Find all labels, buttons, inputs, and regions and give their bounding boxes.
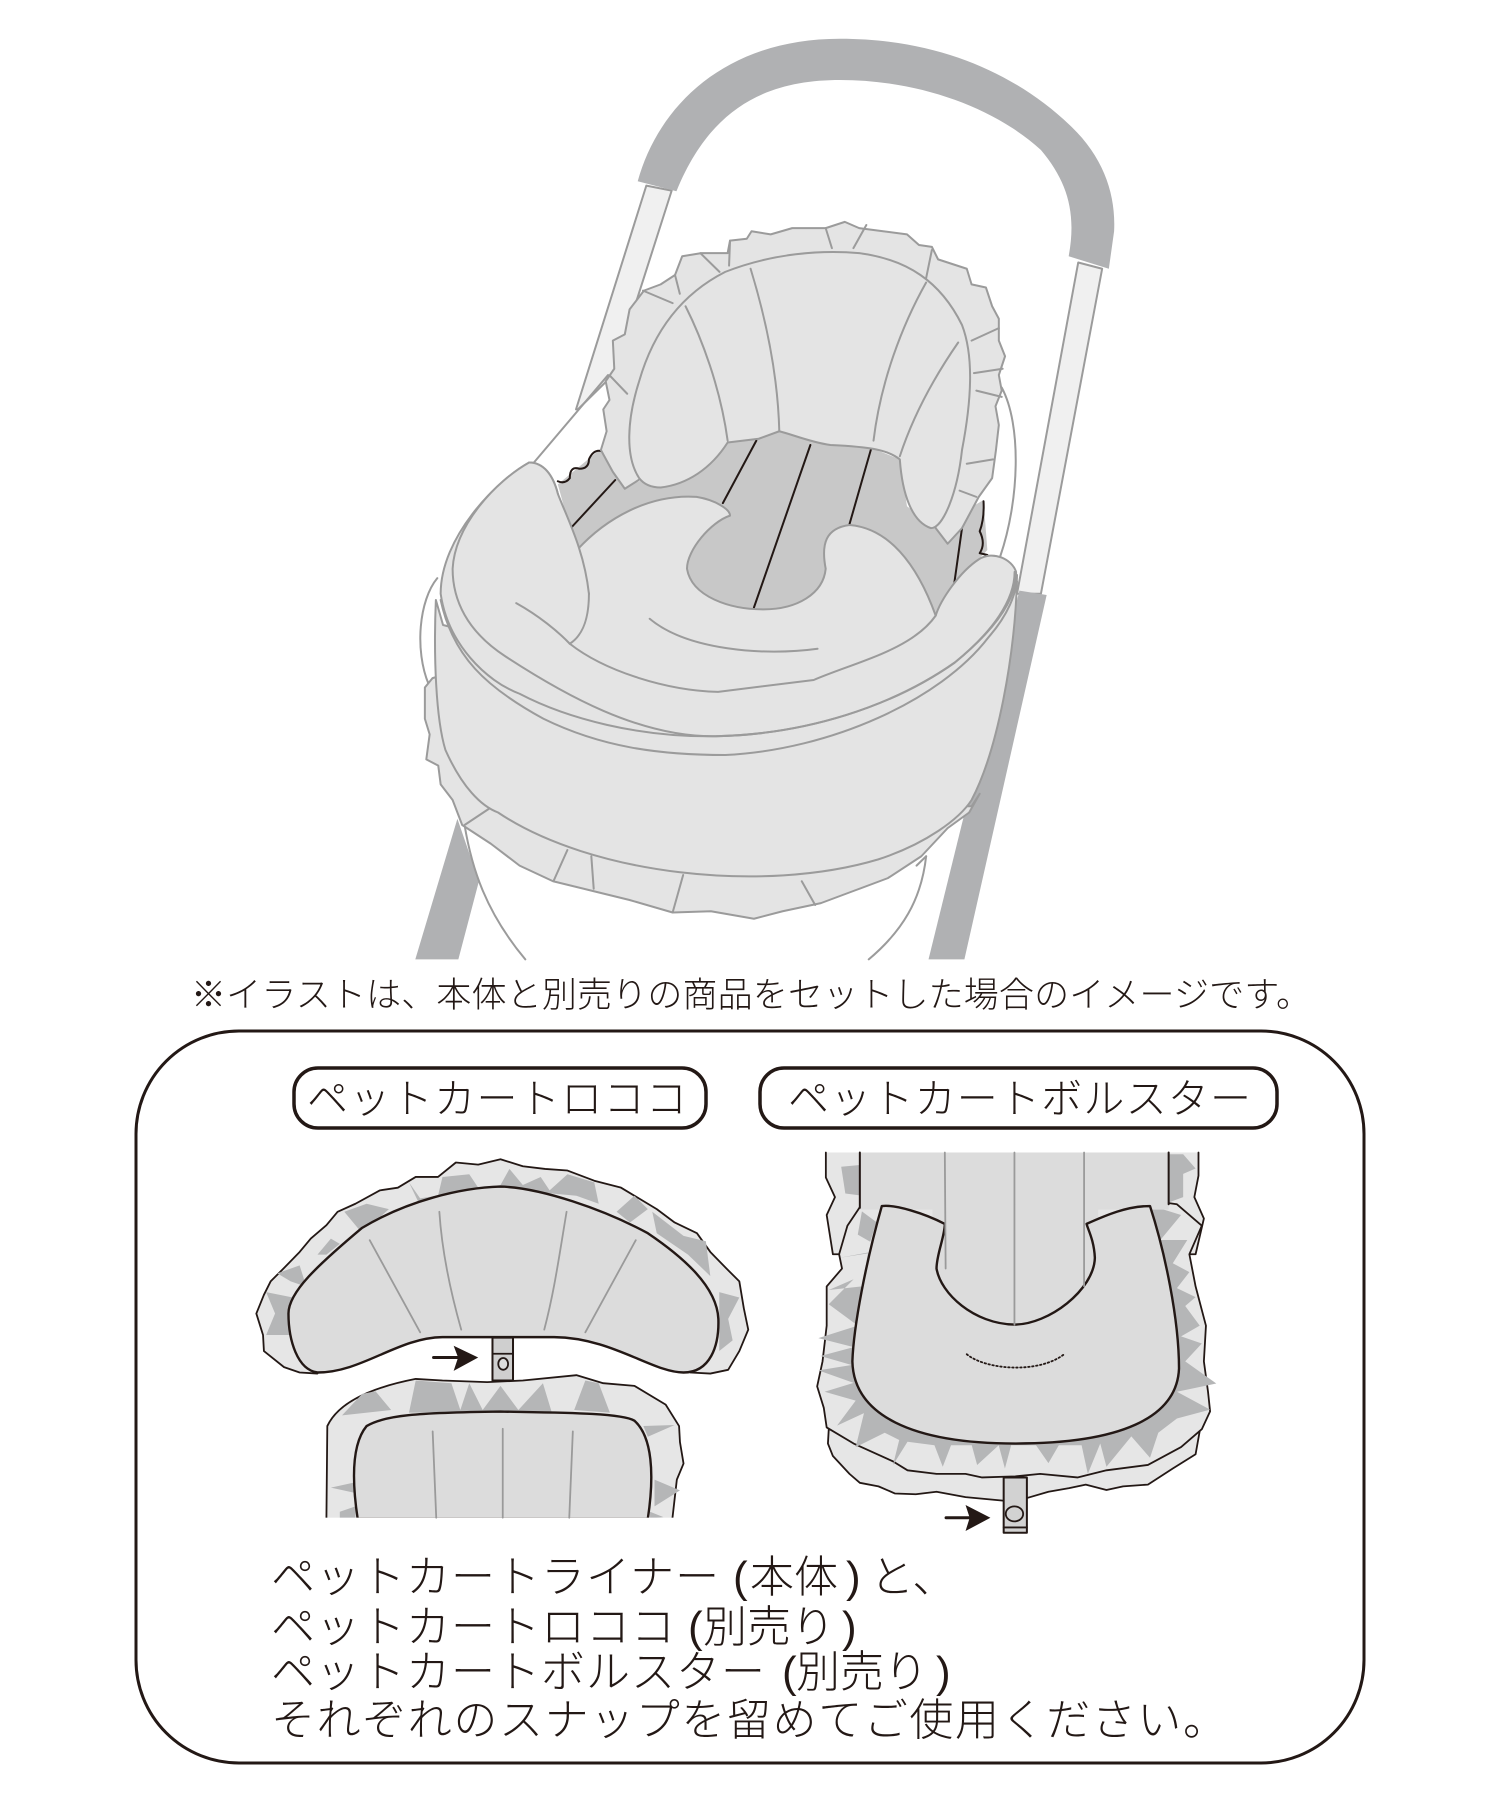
- snap strap: [492, 1338, 513, 1381]
- crescent cushion: [288, 1187, 718, 1372]
- illustration: stroller with liner: [415, 39, 1114, 959]
- arrow: [434, 1346, 478, 1371]
- seat back fill: [558, 431, 987, 631]
- U-shaped bolster cushion: [852, 1206, 1179, 1444]
- straps: [420, 375, 1016, 684]
- panel border: [136, 1031, 1364, 1763]
- seat cushion: [570, 497, 936, 692]
- left upper frame tube: [576, 186, 672, 409]
- caption note: ※イラストは、本体と別売りの商品をセットした場合のイメージです。: [191, 976, 1311, 1015]
- back panel: [354, 1412, 651, 1519]
- arrow: [946, 1505, 990, 1531]
- instruction text: [271, 1553, 1227, 1745]
- back ruffle shading: [841, 1154, 1196, 1202]
- rococo illustration: [256, 1159, 748, 1522]
- cover bottom cut line: [322, 1518, 679, 1522]
- bag under seat outline: [465, 825, 926, 959]
- instruction text: ペットカートロココ: [271, 1603, 676, 1652]
- bolster illustration: [817, 1152, 1216, 1533]
- label pill: bolster: ペットカートボルスター: [788, 1076, 1251, 1122]
- lower back ruffle: [425, 675, 980, 919]
- front body of bolster: [435, 581, 1017, 876]
- back strip panel: [860, 1152, 1169, 1327]
- bolster top rim: [441, 462, 1016, 736]
- instruction text: ペットカートボルスター: [271, 1648, 766, 1697]
- lower ruffle pleats: [465, 808, 926, 912]
- instruction text: (: [733, 1553, 748, 1602]
- label pill: rococo: ペットカートロココ: [307, 1076, 687, 1122]
- back strip pleats: [945, 1152, 1084, 1325]
- instruction text: 別売り: [796, 1648, 928, 1697]
- instruction text: 別売り: [703, 1603, 835, 1652]
- crescent pleats: [370, 1212, 636, 1332]
- instruction text: (: [782, 1648, 797, 1697]
- back strip edges: [860, 1152, 1169, 1208]
- instruction text: ): [842, 1603, 857, 1652]
- headrest pleats: [686, 269, 958, 456]
- dotted stitch: [967, 1354, 1065, 1368]
- back panel pleats: [433, 1429, 573, 1518]
- instruction text: ペットカートライナー: [271, 1553, 720, 1602]
- back ruffle shading: [331, 1381, 680, 1519]
- wavy seat edges: [558, 451, 987, 555]
- label pill: bolster: [760, 1068, 1277, 1128]
- panel: how to attach: [136, 1031, 1364, 1763]
- upper ruffle layer: [817, 1202, 1210, 1477]
- right upper frame tube: [1017, 262, 1102, 594]
- seat stripes: [571, 441, 962, 608]
- ruffle pleats: [610, 225, 1003, 497]
- headrest cushion: [629, 252, 970, 528]
- stroller handle grip: [638, 39, 1114, 269]
- left arm of bolster: [453, 462, 589, 650]
- right lower frame: [929, 591, 1047, 959]
- instruction text: それぞれのスナップを留めてご使用ください。: [271, 1696, 1227, 1745]
- lower ruffle layer: [828, 1429, 1200, 1501]
- crescent ruffle shading: [266, 1169, 739, 1351]
- instruction text: 本体: [750, 1553, 838, 1602]
- back strip ruffle: [826, 1152, 1204, 1254]
- back ruffle: [326, 1375, 684, 1519]
- instruction text: と、: [870, 1553, 956, 1602]
- ruffle shading: [818, 1208, 1216, 1474]
- instruction text: ): [936, 1648, 951, 1697]
- instruction text: (: [688, 1603, 703, 1652]
- snap strap: [1004, 1477, 1027, 1533]
- crescent ruffle: [256, 1159, 748, 1374]
- instruction text: ): [846, 1553, 861, 1602]
- bolster stitching lines: [441, 462, 1017, 755]
- left lower frame: [415, 819, 479, 959]
- rear ruffle: [601, 222, 1005, 544]
